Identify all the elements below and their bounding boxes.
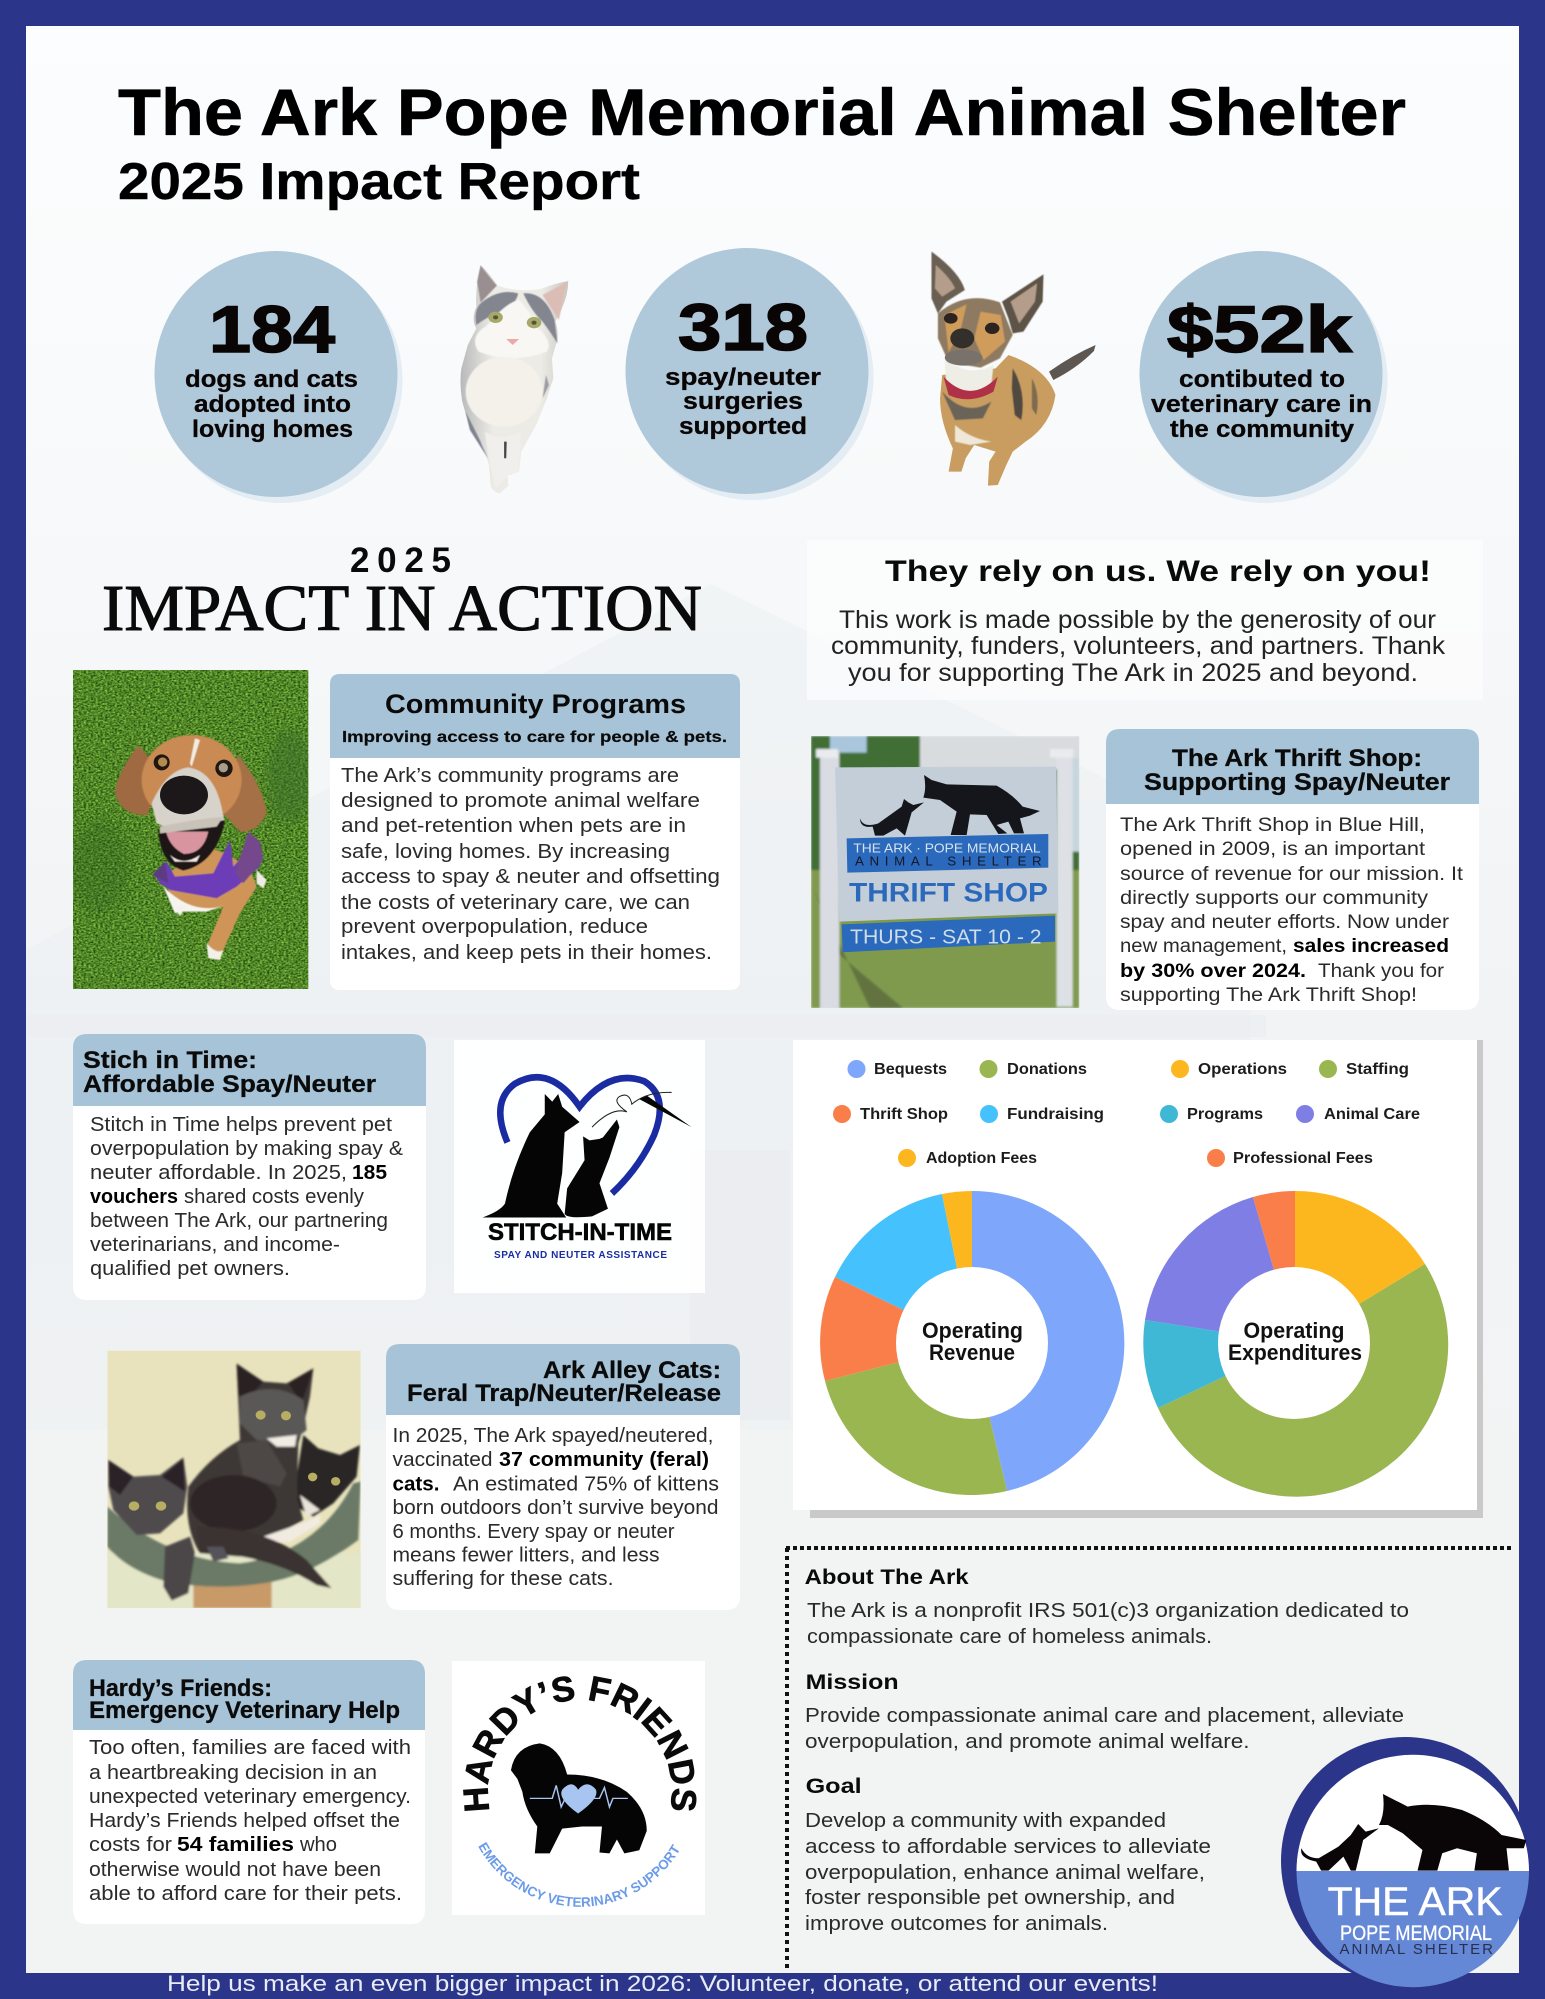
title: The Ark Pope Memorial Animal Shelter bbox=[118, 75, 1406, 149]
footer call to action: Help us make an even bigger impact in 2026: Volunteer, donate, or attend our events! bbox=[167, 1971, 1158, 1996]
panel: community programs: prevent overpopulation, reduce bbox=[341, 916, 648, 938]
stat circle: veterinary care dollars bbox=[1140, 251, 1388, 503]
stat circle: surgeries: 318 bbox=[678, 290, 808, 364]
legend: revenue bbox=[833, 1060, 1104, 1167]
legend: expenditures: Animal Care bbox=[1324, 1106, 1420, 1123]
panel: ark thrift shop: Thank you for bbox=[1318, 961, 1445, 982]
panel: ark alley cats: vaccinated bbox=[392, 1449, 492, 1471]
callout: they rely on us: They rely on us. We rely on you! bbox=[885, 555, 1431, 588]
stat circle: surgeries: supported bbox=[679, 413, 807, 440]
panel: community programs: designed to promote animal welfare bbox=[341, 790, 700, 812]
panel: stitch in time: veterinarians, and income- bbox=[90, 1234, 340, 1256]
panel: hardy's friends bbox=[73, 1660, 425, 1924]
panel: community programs: access to spay & neuter and offsetting bbox=[341, 866, 720, 888]
stat circle: veterinary care dollars: $52k bbox=[1167, 292, 1352, 366]
stat circle: adoptions bbox=[154, 251, 402, 503]
goal text block: Develop a community with expanded bbox=[805, 1810, 1166, 1832]
photo: three gray kittens bbox=[107, 1351, 361, 1608]
logo: stitch in time bbox=[454, 1040, 705, 1293]
stat circle: veterinary care dollars: veterinary care in bbox=[1151, 391, 1372, 418]
chart panel: operating revenue and expenditures bbox=[793, 1040, 1483, 1518]
callout: they rely on us bbox=[807, 540, 1483, 700]
photo: thrift shop sign bbox=[811, 736, 1079, 1008]
panel: hardy's friends: Too often, families are faced with bbox=[89, 1737, 411, 1759]
mission text block bbox=[805, 1671, 1404, 1753]
panel: community programs bbox=[330, 674, 740, 990]
panel: ark thrift shop: source of revenue for our mission. It bbox=[1120, 864, 1464, 885]
stat circle: adoptions: 184 bbox=[209, 292, 335, 366]
logo: hardy's friends bbox=[452, 1661, 705, 1915]
heading: 2025 impact in action bbox=[102, 541, 702, 645]
donut chart: operating revenue: Operating bbox=[922, 1318, 1023, 1343]
legend: revenue: Adoption Fees bbox=[926, 1150, 1037, 1167]
panel: ark alley cats: born outdoors don’t survive beyond bbox=[392, 1497, 718, 1519]
panel: ark alley cats: Ark Alley Cats: bbox=[543, 1357, 721, 1384]
goal text block: access to affordable services to alleviate bbox=[805, 1836, 1211, 1858]
donut chart: operating expenditures: Expenditures bbox=[1228, 1340, 1362, 1365]
legend: expenditures bbox=[1160, 1060, 1420, 1167]
logo: hardy's friends: EMERGENCY VETERINARY SUPPORT bbox=[478, 1842, 679, 1907]
panel: stitch in time: shared costs evenly bbox=[184, 1186, 364, 1208]
stat circle: surgeries: spay/neuter bbox=[665, 364, 821, 391]
about text block: About The Ark bbox=[805, 1566, 969, 1589]
legend: expenditures: Programs bbox=[1187, 1106, 1263, 1123]
logo: the ark: POPE MEMORIAL bbox=[1340, 1922, 1492, 1945]
panel: ark alley cats: suffering for these cats. bbox=[392, 1568, 614, 1590]
goal text block: improve outcomes for animals. bbox=[805, 1913, 1108, 1935]
donut chart: operating revenue: Revenue bbox=[929, 1340, 1015, 1365]
goal text block: Goal bbox=[806, 1775, 862, 1798]
legend: expenditures: Operations bbox=[1198, 1061, 1287, 1078]
legend: revenue: Thrift Shop bbox=[860, 1106, 948, 1123]
logo: the ark: ANIMAL SHELTER bbox=[1340, 1941, 1493, 1958]
panel: ark thrift shop: The Ark Thrift Shop: bbox=[1172, 745, 1422, 772]
panel: ark thrift shop: supporting The Ark Thrift Shop! bbox=[1120, 985, 1417, 1006]
title bbox=[118, 75, 1406, 211]
stat circle: adoptions: adopted into bbox=[194, 391, 351, 418]
panel: ark alley cats: An estimated 75% of kittens bbox=[453, 1474, 719, 1496]
panel: community programs: The Ark’s community programs are bbox=[341, 765, 679, 787]
about text block: The Ark is a nonprofit IRS 501(c)3 organization dedicated to bbox=[807, 1600, 1409, 1622]
callout: they rely on us: you for supporting The Ark in 2025 and beyond. bbox=[848, 659, 1418, 687]
panel: community programs: Improving access to care for people & pets. bbox=[342, 729, 727, 746]
panel: ark thrift shop: sales increased bbox=[1293, 936, 1449, 957]
panel: ark thrift shop: by 30% over 2024. bbox=[1120, 961, 1306, 982]
stat circle: adoptions: dogs and cats bbox=[185, 366, 358, 393]
panel: community programs: the costs of veterinary care, we can bbox=[341, 892, 690, 914]
legend: expenditures: Staffing bbox=[1346, 1061, 1409, 1078]
panel: stitch in time: Stich in Time: bbox=[83, 1047, 257, 1074]
panel: stitch in time: overpopulation by making spay & bbox=[90, 1138, 404, 1160]
panel: ark alley cats: In 2025, The Ark spayed/neutered, bbox=[392, 1425, 714, 1447]
donut chart: operating expenditures bbox=[1143, 1191, 1448, 1497]
stat circle: veterinary care dollars: contibuted to bbox=[1179, 366, 1345, 393]
photo: thrift shop sign: ANIMAL SHELTER bbox=[855, 854, 1042, 869]
goal text block: overpopulation, enhance animal welfare, bbox=[805, 1862, 1205, 1884]
panel: stitch in time: between The Ark, our partnering bbox=[90, 1210, 388, 1232]
photo: gray and white cat cutout bbox=[460, 265, 568, 493]
donut chart: operating revenue bbox=[820, 1191, 1124, 1495]
panel: hardy's friends: Hardy’s Friends: bbox=[89, 1675, 272, 1702]
legend: revenue: Bequests bbox=[874, 1061, 947, 1078]
panel: ark thrift shop: directly supports our community bbox=[1120, 888, 1429, 909]
panel: stitch in time: 185 bbox=[352, 1162, 387, 1184]
panel: about the ark, mission, goal bbox=[786, 1548, 1511, 1972]
panel: ark thrift shop: new management, bbox=[1120, 936, 1287, 957]
panel: ark alley cats: 37 community (feral) bbox=[499, 1449, 709, 1471]
legend: revenue: Fundraising bbox=[1007, 1106, 1104, 1123]
panel: ark alley cats: cats. bbox=[392, 1474, 440, 1496]
logo: stitch in time: SPAY AND NEUTER ASSISTANCE bbox=[494, 1250, 667, 1261]
panel: stitch in time: neuter affordable. In 2025, bbox=[90, 1162, 347, 1184]
panel: hardy's friends: otherwise would not have been bbox=[89, 1859, 381, 1881]
logo: stitch in time: STITCH-IN-TIME bbox=[488, 1219, 672, 1246]
heading: 2025 impact in action: 2025 bbox=[350, 541, 457, 580]
panel: ark alley cats: 6 months. Every spay or neuter bbox=[392, 1521, 675, 1543]
stat circle: surgeries: surgeries bbox=[683, 388, 803, 415]
photo: thrift shop sign: THRIFT SHOP bbox=[849, 878, 1048, 908]
heading: 2025 impact in action: IMPACT IN ACTION bbox=[102, 572, 702, 645]
panel: hardy's friends: a heartbreaking decision in an bbox=[89, 1762, 377, 1784]
panel: ark thrift shop: The Ark Thrift Shop in Blue Hill, bbox=[1120, 815, 1425, 836]
panel: community programs: safe, loving homes. By increasing bbox=[341, 841, 670, 863]
photo: tan chihuahua cutout bbox=[932, 252, 1096, 486]
donut chart: operating expenditures: Operating bbox=[1244, 1318, 1344, 1343]
stat circle: surgeries bbox=[626, 248, 874, 500]
panel: hardy's friends: who bbox=[299, 1834, 337, 1856]
stat circle: adoptions: loving homes bbox=[192, 416, 353, 443]
panel: hardy's friends: able to afford care for their pets. bbox=[89, 1883, 402, 1905]
about text block: compassionate care of homeless animals. bbox=[807, 1626, 1212, 1648]
panel: ark thrift shop: spay and neuter efforts. Now under bbox=[1120, 912, 1450, 933]
panel: ark alley cats: means fewer litters, and less bbox=[392, 1544, 660, 1566]
panel: ark thrift shop: Supporting Spay/Neuter bbox=[1144, 769, 1450, 796]
goal text block bbox=[805, 1775, 1211, 1935]
stat circle: veterinary care dollars: the community bbox=[1170, 416, 1355, 443]
photo: thrift shop sign: THE ARK · POPE MEMORIAL bbox=[853, 840, 1041, 855]
panel: hardy's friends: unexpected veterinary emergency. bbox=[89, 1786, 411, 1808]
mission text block: Mission bbox=[806, 1671, 899, 1694]
panel: stitch in time: Affordable Spay/Neuter bbox=[83, 1071, 376, 1098]
goal text block: foster responsible pet ownership, and bbox=[805, 1887, 1175, 1909]
panel: hardy's friends: costs for bbox=[89, 1834, 172, 1856]
about text block bbox=[805, 1566, 1409, 1648]
panel: ark alley cats bbox=[386, 1344, 740, 1610]
legend: revenue: Donations bbox=[1007, 1061, 1087, 1078]
photo: thrift shop sign: THURS - SAT 10 - 2 bbox=[850, 927, 1042, 949]
logo: the ark bbox=[1281, 1737, 1529, 1987]
panel: stitch in time: vouchers bbox=[90, 1186, 178, 1208]
mission text block: Provide compassionate animal care and placement, alleviate bbox=[805, 1705, 1404, 1727]
mission text block: overpopulation, and promote animal welfare. bbox=[805, 1731, 1250, 1753]
panel: stitch in time bbox=[73, 1034, 426, 1300]
panel: hardy's friends: 54 families bbox=[177, 1834, 294, 1856]
panel: community programs: Community Programs bbox=[385, 689, 686, 719]
logo: the ark: THE ARK bbox=[1328, 1880, 1503, 1924]
panel: community programs: and pet-retention when pets are in bbox=[341, 815, 686, 837]
title: 2025 Impact Report bbox=[118, 153, 640, 211]
panel: stitch in time: qualified pet owners. bbox=[90, 1258, 290, 1280]
panel: community programs: intakes, and keep pets in their homes. bbox=[341, 942, 712, 964]
logo: hardy's friends: HARDY’S FRIENDS bbox=[463, 1676, 696, 1811]
panel: ark thrift shop bbox=[1106, 729, 1479, 1010]
panel: hardy's friends: Hardy’s Friends helped offset the bbox=[89, 1810, 400, 1832]
legend: expenditures: Professional Fees bbox=[1233, 1150, 1373, 1167]
callout: they rely on us: This work is made possible by the generosity of our bbox=[839, 606, 1436, 634]
panel: ark alley cats: Feral Trap/Neuter/Release bbox=[407, 1380, 721, 1407]
panel: stitch in time: Stitch in Time helps prevent pet bbox=[90, 1114, 392, 1136]
photo: beagle dog in grass bbox=[70, 670, 313, 989]
panel: hardy's friends: Emergency Veterinary Help bbox=[89, 1697, 400, 1724]
callout: they rely on us: community, funders, volunteers, and partners. Thank bbox=[831, 632, 1446, 660]
panel: ark thrift shop: opened in 2009, is an important bbox=[1120, 839, 1426, 860]
